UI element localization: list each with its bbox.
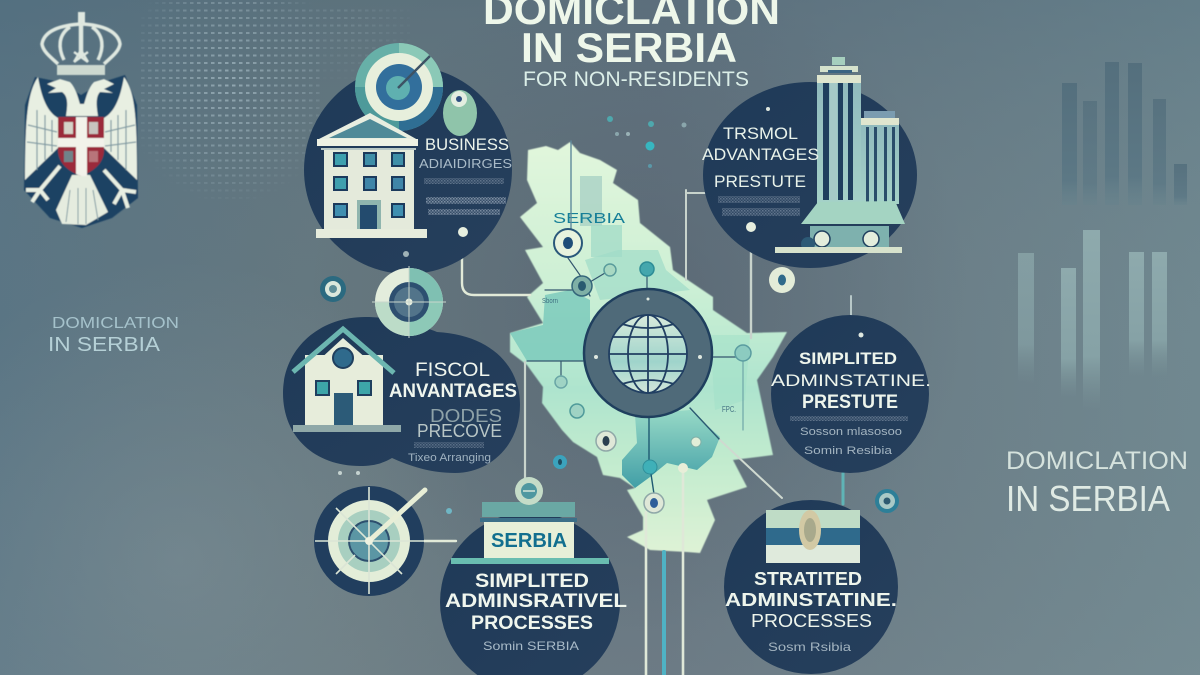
map label: SERBIA bbox=[553, 210, 625, 227]
icon: small knob right bbox=[769, 267, 795, 293]
map regions bbox=[510, 176, 750, 488]
simplified processes detail text: Somin SERBIA bbox=[483, 639, 579, 653]
map small labels: FPC. bbox=[722, 405, 736, 414]
panel: stratified administrative processes bbox=[724, 500, 898, 674]
fiscal heading bbox=[389, 360, 517, 402]
icon: target dial bbox=[355, 43, 443, 131]
eagle tail bbox=[56, 175, 108, 225]
icon: sign knob bbox=[515, 477, 543, 505]
business subheading: ADIAIDIRGES bbox=[419, 156, 512, 171]
simplified processes heading bbox=[445, 571, 627, 634]
tax detail text bbox=[718, 196, 800, 216]
side label: left: IN SERBIA bbox=[48, 334, 161, 356]
eagle talons bbox=[26, 166, 136, 208]
fiscal detail text bbox=[408, 406, 502, 464]
faded bar chart backdrop bbox=[1018, 62, 1187, 410]
simplified processes heading: PROCESSES bbox=[471, 613, 593, 634]
icon: flag bbox=[766, 510, 860, 563]
eagle wings bbox=[25, 77, 58, 180]
eagle heads and neck bbox=[47, 79, 114, 116]
icon: office building bbox=[316, 113, 427, 238]
title bbox=[483, 0, 780, 91]
fiscal heading: FISCOL bbox=[415, 360, 490, 381]
stratified heading: ADMINSTATINE. bbox=[725, 590, 897, 610]
side label: left bbox=[48, 315, 179, 356]
stratified heading: PROCESSES bbox=[751, 611, 872, 631]
icon: small dial left bbox=[320, 276, 346, 302]
map nodes bbox=[553, 116, 751, 513]
icon: office towers bbox=[775, 57, 905, 253]
crest backing shape bbox=[24, 75, 138, 228]
panel: simplified administrative processes bbox=[440, 502, 627, 675]
fiscal detail text: Tixeo Arranging bbox=[408, 452, 491, 464]
icon: house bbox=[293, 329, 401, 432]
icon: Serbia sign building bbox=[451, 502, 609, 564]
red shield bbox=[58, 117, 104, 176]
small accent dots bbox=[338, 471, 452, 514]
stratified detail text: Sosm Rsibia bbox=[768, 640, 851, 654]
side label: right: IN SERBIA bbox=[1006, 478, 1170, 519]
tax heading: TRSMOL bbox=[723, 124, 798, 143]
dot pattern backdrop bbox=[141, 2, 386, 192]
simplified heading: ADMINSTATINE. bbox=[771, 371, 931, 390]
side label: right bbox=[1006, 447, 1188, 519]
business detail text bbox=[424, 178, 506, 215]
icon: crosshair dial bbox=[372, 266, 446, 338]
stratified heading bbox=[725, 569, 897, 631]
fiscal heading: ANVANTAGES bbox=[389, 381, 517, 402]
icon: Serbian coat of arms bbox=[24, 12, 138, 228]
panel: business advantages bbox=[304, 43, 512, 274]
panel: tax advantages bbox=[702, 57, 917, 268]
fiscal detail text: PRECOVE bbox=[417, 421, 502, 441]
pin: tax connector bbox=[746, 222, 756, 232]
simplified detail text: Somin Resibia bbox=[804, 445, 893, 457]
simplified heading: PRESTUTE bbox=[802, 392, 898, 413]
title: FOR NON-RESIDENTS bbox=[523, 68, 749, 91]
business heading: BUSINESS bbox=[425, 135, 509, 154]
icon: Serbia sign building: SERBIA bbox=[491, 530, 567, 552]
simplified detail text bbox=[790, 416, 908, 457]
panel: simplified administrative pressure bbox=[771, 315, 931, 473]
simplified processes heading: SIMPLITED bbox=[475, 571, 589, 592]
side label: right: DOMICLATION bbox=[1006, 447, 1188, 475]
stratified heading: STRATITED bbox=[754, 569, 862, 589]
tax heading bbox=[702, 124, 819, 191]
icon: capsule bbox=[443, 90, 477, 136]
simplified heading bbox=[771, 349, 931, 413]
simplified processes heading: ADMINSRATIVEL bbox=[445, 591, 627, 612]
icon: gauge dial bbox=[314, 486, 425, 596]
title: IN SERBIA bbox=[521, 24, 737, 71]
tax heading: PRESTUTE bbox=[714, 172, 806, 191]
globe emblem bbox=[584, 289, 712, 417]
tax heading: ADVANTAGES bbox=[702, 145, 819, 164]
map small labels bbox=[542, 298, 736, 414]
map small labels: Sborn bbox=[542, 298, 558, 305]
simplified heading: SIMPLITED bbox=[799, 349, 897, 368]
fiscal detail text: DODES bbox=[430, 406, 502, 426]
side label: left: DOMICLATION bbox=[52, 315, 179, 332]
simplified detail text: Sosson mlasosoo bbox=[800, 426, 902, 438]
pin: business connector bbox=[403, 227, 468, 257]
icon: cyan knob bbox=[875, 489, 899, 513]
connector lines bbox=[424, 141, 851, 675]
crown bbox=[42, 12, 120, 75]
panel: fiscal advantages bbox=[283, 317, 520, 473]
map of Serbia bbox=[510, 142, 787, 553]
